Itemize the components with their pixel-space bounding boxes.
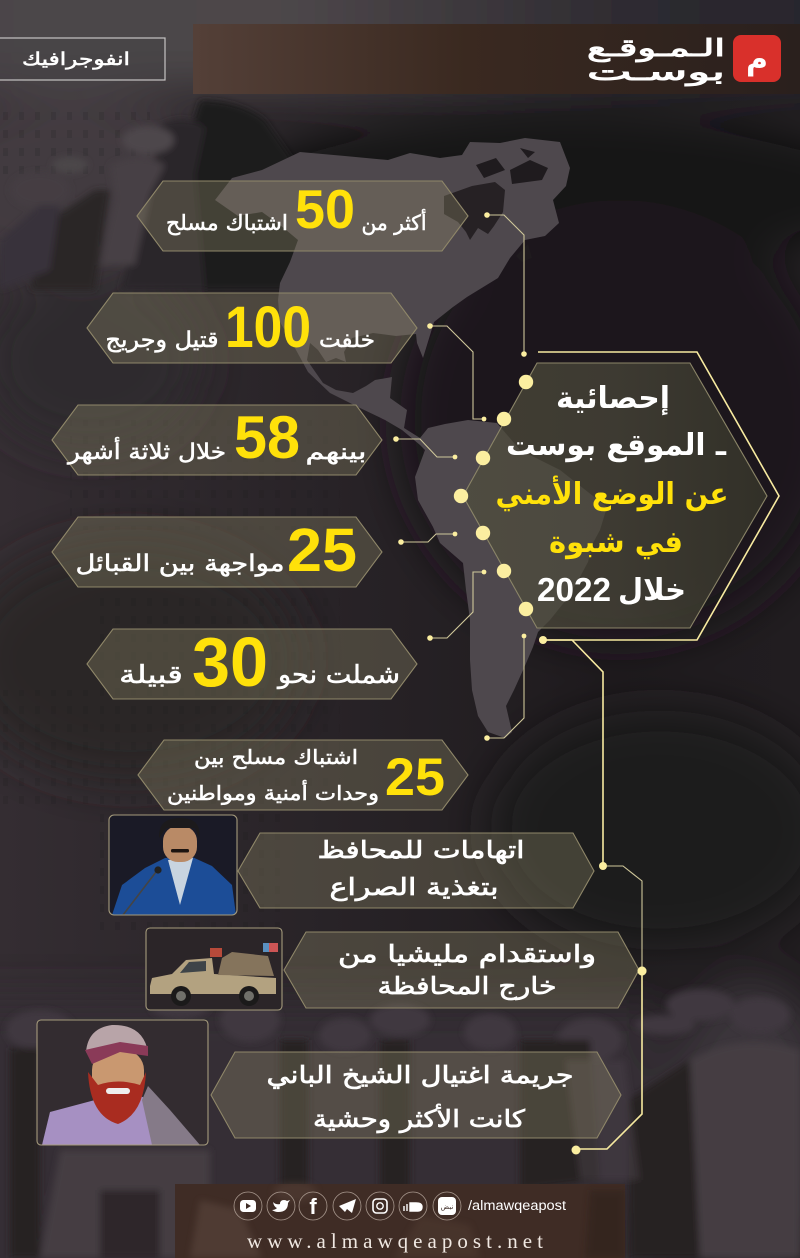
logo: الـمـوقـع <box>587 34 725 62</box>
banner: 25 clashes with security units: اشتباك مسلح بين <box>194 745 358 769</box>
banner: 100 killed and wounded <box>87 293 417 363</box>
photo: military pickup truck <box>146 928 282 1010</box>
main hexagon panel <box>463 363 767 628</box>
banner: covered about 30 tribes: قبيلة <box>119 660 183 689</box>
dark bays and channels <box>444 182 505 240</box>
connector lines <box>396 215 779 1149</box>
banner: Al-Bani assassination: جريمة اغتيال الشيخ الباني <box>266 1061 574 1089</box>
banner: including 58 in three months: خلال ثلاثة أشهر <box>67 437 226 465</box>
banner: 100 killed and wounded: 100 <box>225 295 311 360</box>
banner: accusations against the governor: بتغذية الصراع <box>330 873 498 901</box>
main title text: عن الوضع الأمني <box>496 475 728 512</box>
tag: infographic label: انفوجرافيك <box>22 49 130 70</box>
banner: 25 tribal confrontations: 25 <box>287 516 357 584</box>
banner: including 58 in three months: 58 <box>234 404 300 471</box>
banner: 25 tribal confrontations <box>52 516 382 587</box>
main title text: ـ الموقع بوست <box>506 428 727 463</box>
world map silhouette: the Americas <box>215 138 607 738</box>
banner: 100 killed and wounded: قتيل وجريج <box>106 328 218 353</box>
banner: covered about 30 tribes: شملت نحو <box>276 660 400 689</box>
banner: 25 clashes with security units <box>138 740 468 810</box>
banner: accusations against the governor <box>238 833 594 908</box>
banner: more than 50 clashes: 50 <box>295 178 355 240</box>
banner: use of militias: واستقدام مليشيا من <box>338 940 596 968</box>
main title text: 2022 <box>537 571 611 608</box>
buildings texture <box>0 110 340 940</box>
banner: covered about 30 tribes <box>87 623 417 701</box>
social icons: نبض <box>441 1203 453 1211</box>
banner: more than 50 clashes <box>137 178 468 251</box>
social handle: /almawqeapost <box>468 1198 566 1213</box>
social icons <box>234 1192 461 1220</box>
logo: بوسـت <box>587 58 725 86</box>
logo: م <box>746 42 768 77</box>
node dot: militia banner <box>638 966 646 976</box>
website: www.almawqeapost.net <box>247 1229 543 1253</box>
banner: more than 50 clashes: أكثر من <box>362 209 426 235</box>
main title text: في شبوة <box>549 525 683 560</box>
banner: including 58 in three months: بينهم <box>306 440 366 465</box>
banner: Al-Bani assassination <box>211 1052 621 1138</box>
main title text: خلال <box>618 573 686 608</box>
main title text <box>496 381 728 608</box>
banner: Al-Bani assassination: كانت الأكثر وحشية <box>313 1104 526 1133</box>
tag: infographic label <box>0 38 165 80</box>
photo: governor <box>109 815 237 915</box>
banner: use of militias <box>284 932 639 1008</box>
photo: Sheikh Al-Bani <box>37 1020 208 1145</box>
footer band <box>175 1182 625 1258</box>
banner: 25 clashes with security units: وحدات أمنية ومواطنين <box>167 780 379 805</box>
social icons: f <box>309 1194 317 1219</box>
connector dots <box>393 212 646 1154</box>
banner: more than 50 clashes: اشتباك مسلح <box>166 211 288 235</box>
hexagon node dots <box>454 375 533 616</box>
header band <box>193 24 800 94</box>
banner: use of militias: خارج المحافظة <box>378 972 556 1000</box>
banner: covered about 30 tribes: 30 <box>192 623 268 701</box>
banner: 100 killed and wounded: خلفت <box>319 328 375 353</box>
logo <box>587 34 781 86</box>
banner: 25 tribal confrontations: مواجهة بين القبائل <box>76 551 284 577</box>
banner: 25 clashes with security units: 25 <box>385 748 445 807</box>
main title text: إحصائية <box>556 381 670 416</box>
lower crowd <box>6 989 790 1062</box>
banner: accusations against the governor: اتهامات للمحافظ <box>318 836 524 864</box>
banner: including 58 in three months <box>52 404 382 475</box>
